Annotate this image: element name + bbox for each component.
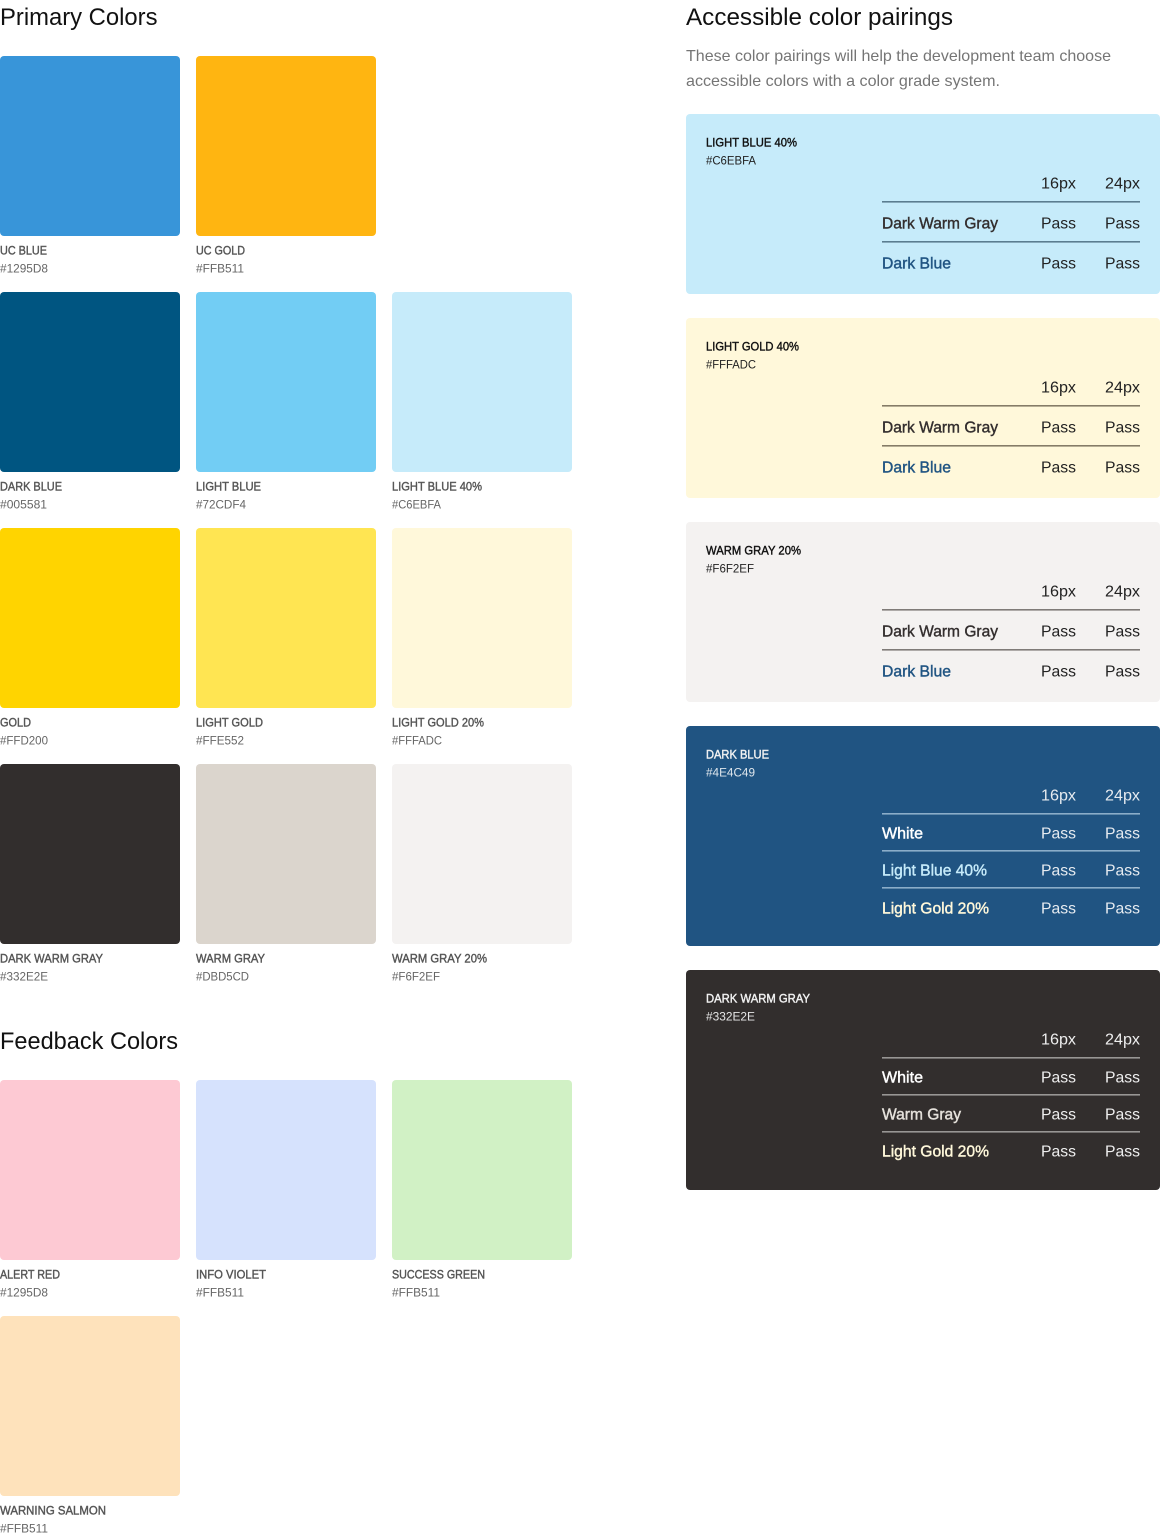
swatch: Dark Blue: #005581	[0, 498, 47, 512]
panel: Dark Warm Gray pairings: Pass	[1105, 1106, 1140, 1124]
swatch: UC Blue: #1295D8	[0, 262, 48, 276]
panel: Dark Blue pairings: 16px	[1041, 788, 1076, 804]
swatch: Success Green	[392, 1080, 572, 1300]
panel: Warm Gray 20% pairings: WARM GRAY 20%	[706, 544, 801, 558]
swatch: Success Green: #FFB511	[392, 1286, 440, 1300]
panel: Light Blue 40% pairings: Dark Blue	[882, 256, 951, 272]
panel: Dark Warm Gray pairings	[686, 970, 1160, 1190]
panel: Dark Blue pairings: Pass	[1105, 862, 1140, 880]
swatch: Warning Salmon: WARNING SALMON	[0, 1504, 106, 1518]
swatch: Warm Gray 20%	[392, 764, 572, 984]
panel: Dark Blue pairings: Light Gold 20%	[882, 900, 989, 918]
panel: Light Gold 40% pairings: Pass	[1041, 460, 1076, 476]
panel: Dark Blue pairings: Pass	[1041, 862, 1076, 880]
swatch: Light Gold 20%: LIGHT GOLD 20%	[392, 716, 484, 730]
panel: Dark Blue pairings: Pass	[1105, 826, 1140, 842]
swatch: UC Gold: UC GOLD	[196, 244, 245, 258]
panel: Dark Warm Gray pairings: Pass	[1041, 1106, 1076, 1124]
swatch: Light Gold: LIGHT GOLD	[196, 716, 263, 730]
swatch: Light Gold 20%	[392, 528, 572, 748]
swatch: Light Blue 40%: #C6EBFA	[392, 498, 441, 512]
swatch: Warm Gray	[196, 764, 376, 984]
panel: Warm Gray 20% pairings: #F6F2EF	[706, 562, 754, 576]
swatch: Light Gold 20%: #FFFADC	[392, 734, 442, 748]
panel: Light Blue 40% pairings: Pass	[1105, 216, 1140, 232]
panel: Light Blue 40% pairings: #C6EBFA	[706, 154, 756, 168]
panel: Warm Gray 20% pairings: 24px	[1105, 584, 1140, 600]
swatch: Warm Gray 20%: WARM GRAY 20%	[392, 952, 487, 966]
panel: Warm Gray 20% pairings: Pass	[1105, 624, 1140, 640]
swatch: Gold: GOLD	[0, 716, 31, 730]
panel: Light Blue 40% pairings: Pass	[1041, 256, 1076, 272]
panel: Dark Blue pairings: White	[882, 826, 923, 842]
swatch: UC Gold: #FFB511	[196, 262, 244, 276]
intro text: These color pairings will help the development team choose	[686, 48, 1111, 65]
heading: Accessible color pairings: Accessible color pairings	[686, 4, 953, 31]
swatch: Dark Blue: DARK BLUE	[0, 480, 62, 494]
panel: Light Blue 40% pairings: 16px	[1041, 176, 1076, 192]
swatch: Gold	[0, 528, 180, 748]
heading: Primary Colors: Primary Colors	[0, 4, 158, 31]
swatch: UC Gold	[196, 56, 376, 276]
panel: Light Gold 40% pairings: Pass	[1105, 460, 1140, 476]
panel: Dark Blue pairings	[686, 726, 1160, 946]
swatch: Info Violet: INFO VIOLET	[196, 1268, 267, 1282]
panel: Warm Gray 20% pairings: Pass	[1041, 664, 1076, 680]
swatch: UC Blue	[0, 56, 180, 276]
panel: Light Gold 40% pairings: #FFFADC	[706, 358, 756, 372]
panel: Light Blue 40% pairings	[686, 114, 1160, 294]
panel: Dark Warm Gray pairings: Pass	[1041, 1144, 1076, 1160]
panel: Light Gold 40% pairings: Dark Warm Gray	[882, 420, 998, 436]
panel: Dark Blue pairings: Pass	[1105, 900, 1140, 918]
swatch: Dark Warm Gray: #332E2E	[0, 970, 48, 984]
panel: Dark Warm Gray pairings: #332E2E	[706, 1010, 755, 1024]
panel: Light Gold 40% pairings: LIGHT GOLD 40%	[706, 340, 799, 354]
panel: Dark Warm Gray pairings: White	[882, 1070, 923, 1086]
swatch: Success Green: SUCCESS GREEN	[392, 1268, 485, 1282]
panel: Light Gold 40% pairings: 16px	[1041, 380, 1076, 396]
swatch: Light Blue: LIGHT BLUE	[196, 480, 261, 494]
panel: Dark Blue pairings: #4E4C49	[706, 766, 755, 780]
panel: Light Gold 40% pairings	[686, 318, 1160, 498]
panel: Warm Gray 20% pairings: 16px	[1041, 584, 1076, 600]
swatch: Info Violet: #FFB511	[196, 1286, 244, 1300]
swatch: Warning Salmon: #FFB511	[0, 1522, 48, 1536]
panel: Light Gold 40% pairings: Pass	[1041, 420, 1076, 436]
panel: Dark Warm Gray pairings: Light Gold 20%	[882, 1144, 989, 1160]
panel: Light Blue 40% pairings: LIGHT BLUE 40%	[706, 136, 797, 150]
swatch: Alert Red: ALERT RED	[0, 1268, 60, 1282]
panel: Warm Gray 20% pairings: Dark Warm Gray	[882, 624, 998, 640]
swatch: Light Blue	[196, 292, 376, 512]
panel: Dark Blue pairings: 24px	[1105, 788, 1140, 804]
swatch: Warm Gray: #DBD5CD	[196, 970, 249, 984]
panel: Light Blue 40% pairings: Pass	[1041, 216, 1076, 232]
panel: Dark Warm Gray pairings: Pass	[1105, 1144, 1140, 1160]
swatch: Light Gold: #FFE552	[196, 734, 244, 748]
intro text	[686, 48, 1111, 90]
panel: Dark Warm Gray pairings: 16px	[1041, 1032, 1076, 1048]
swatch: Light Blue 40%	[392, 292, 572, 512]
panel: Dark Blue pairings: Pass	[1041, 900, 1076, 918]
panel: Dark Blue pairings: Pass	[1041, 826, 1076, 842]
panel: Light Gold 40% pairings: Pass	[1105, 420, 1140, 436]
panel: Dark Warm Gray pairings: 24px	[1105, 1032, 1140, 1048]
panel: Dark Warm Gray pairings: DARK WARM GRAY	[706, 992, 810, 1006]
swatch: Gold: #FFD200	[0, 734, 48, 748]
panel: Light Blue 40% pairings: Pass	[1105, 256, 1140, 272]
swatch: Light Blue 40%: LIGHT BLUE 40%	[392, 480, 482, 494]
panel: Warm Gray 20% pairings: Dark Blue	[882, 664, 951, 680]
swatch: Light Gold	[196, 528, 376, 748]
swatch: Dark Blue	[0, 292, 180, 512]
panel: Dark Warm Gray pairings: Warm Gray	[882, 1106, 961, 1124]
heading: Feedback Colors: Feedback Colors	[0, 1028, 178, 1055]
panel: Warm Gray 20% pairings	[686, 522, 1160, 702]
panel: Warm Gray 20% pairings: Pass	[1041, 624, 1076, 640]
swatch: UC Blue: UC BLUE	[0, 244, 47, 258]
swatch: Warning Salmon	[0, 1316, 180, 1536]
panel: Warm Gray 20% pairings: Pass	[1105, 664, 1140, 680]
swatch: Light Blue: #72CDF4	[196, 498, 246, 512]
swatch: Alert Red: #1295D8	[0, 1286, 48, 1300]
panel: Light Gold 40% pairings: Dark Blue	[882, 460, 951, 476]
panel: Dark Blue pairings: Light Blue 40%	[882, 862, 987, 880]
swatch: Dark Warm Gray: DARK WARM GRAY	[0, 952, 103, 966]
panel: Light Gold 40% pairings: 24px	[1105, 380, 1140, 396]
panel: Light Blue 40% pairings: Dark Warm Gray	[882, 216, 998, 232]
panel: Dark Warm Gray pairings: Pass	[1041, 1070, 1076, 1086]
panel: Dark Blue pairings: DARK BLUE	[706, 748, 769, 762]
swatch: Warm Gray 20%: #F6F2EF	[392, 970, 440, 984]
panel: Dark Warm Gray pairings: Pass	[1105, 1070, 1140, 1086]
swatch: Alert Red	[0, 1080, 180, 1300]
swatch: Info Violet	[196, 1080, 376, 1300]
swatch: Dark Warm Gray	[0, 764, 180, 984]
panel: Light Blue 40% pairings: 24px	[1105, 176, 1140, 192]
intro text: accessible colors with a color grade system.	[686, 73, 1000, 90]
swatch: Warm Gray: WARM GRAY	[196, 952, 265, 966]
